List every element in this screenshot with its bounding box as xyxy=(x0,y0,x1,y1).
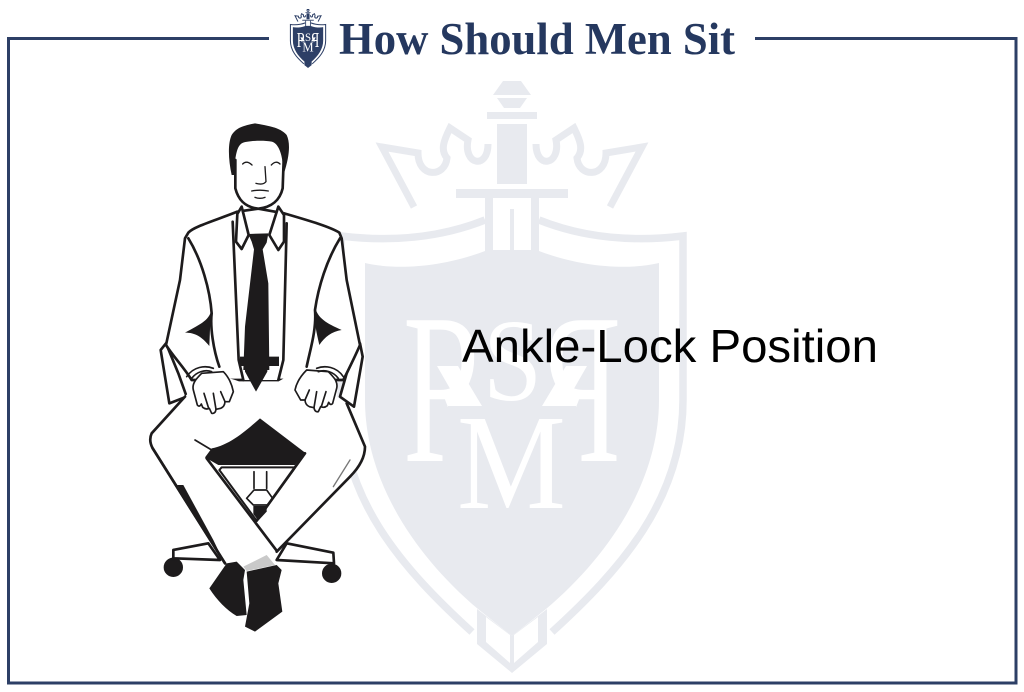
watermark: crest with sword, crown and RSM monogram: R xyxy=(403,271,489,508)
head xyxy=(229,123,289,209)
chair seat xyxy=(195,418,305,521)
sock xyxy=(243,555,275,571)
watermark: crest with sword, crown and RSM monogram xyxy=(341,81,683,673)
shin shadow xyxy=(177,485,224,562)
watermark: crest with sword, crown and RSM monogram: M xyxy=(457,387,566,537)
title logo: small navy crest: S xyxy=(305,31,311,44)
illustration: seated man with crossed ankles xyxy=(150,123,365,632)
front shin edges xyxy=(153,448,277,563)
front shin xyxy=(172,457,277,567)
collar xyxy=(236,207,284,250)
title logo: small navy crest: R xyxy=(310,28,319,52)
chair back xyxy=(161,343,363,407)
tie xyxy=(243,233,269,392)
rear shin inner edge xyxy=(257,453,305,521)
watermark: crest with sword, crown and RSM monogram: R xyxy=(535,271,621,508)
left hand xyxy=(187,367,233,413)
trousers xyxy=(150,377,365,567)
title logo: small navy crest xyxy=(290,9,326,68)
right foot xyxy=(245,565,282,632)
title logo: small navy crest: R xyxy=(297,28,306,52)
watermark: crest with sword, crown and RSM monogram: S xyxy=(483,296,542,426)
chair base xyxy=(165,543,340,582)
belt xyxy=(240,357,279,366)
right hand xyxy=(295,367,343,412)
title logo: small navy crest: M xyxy=(302,39,314,55)
title: How Should Men Sit xyxy=(339,14,735,64)
left foot xyxy=(209,562,247,616)
caption: Ankle-Lock Position xyxy=(462,320,878,372)
jacket xyxy=(166,209,360,380)
